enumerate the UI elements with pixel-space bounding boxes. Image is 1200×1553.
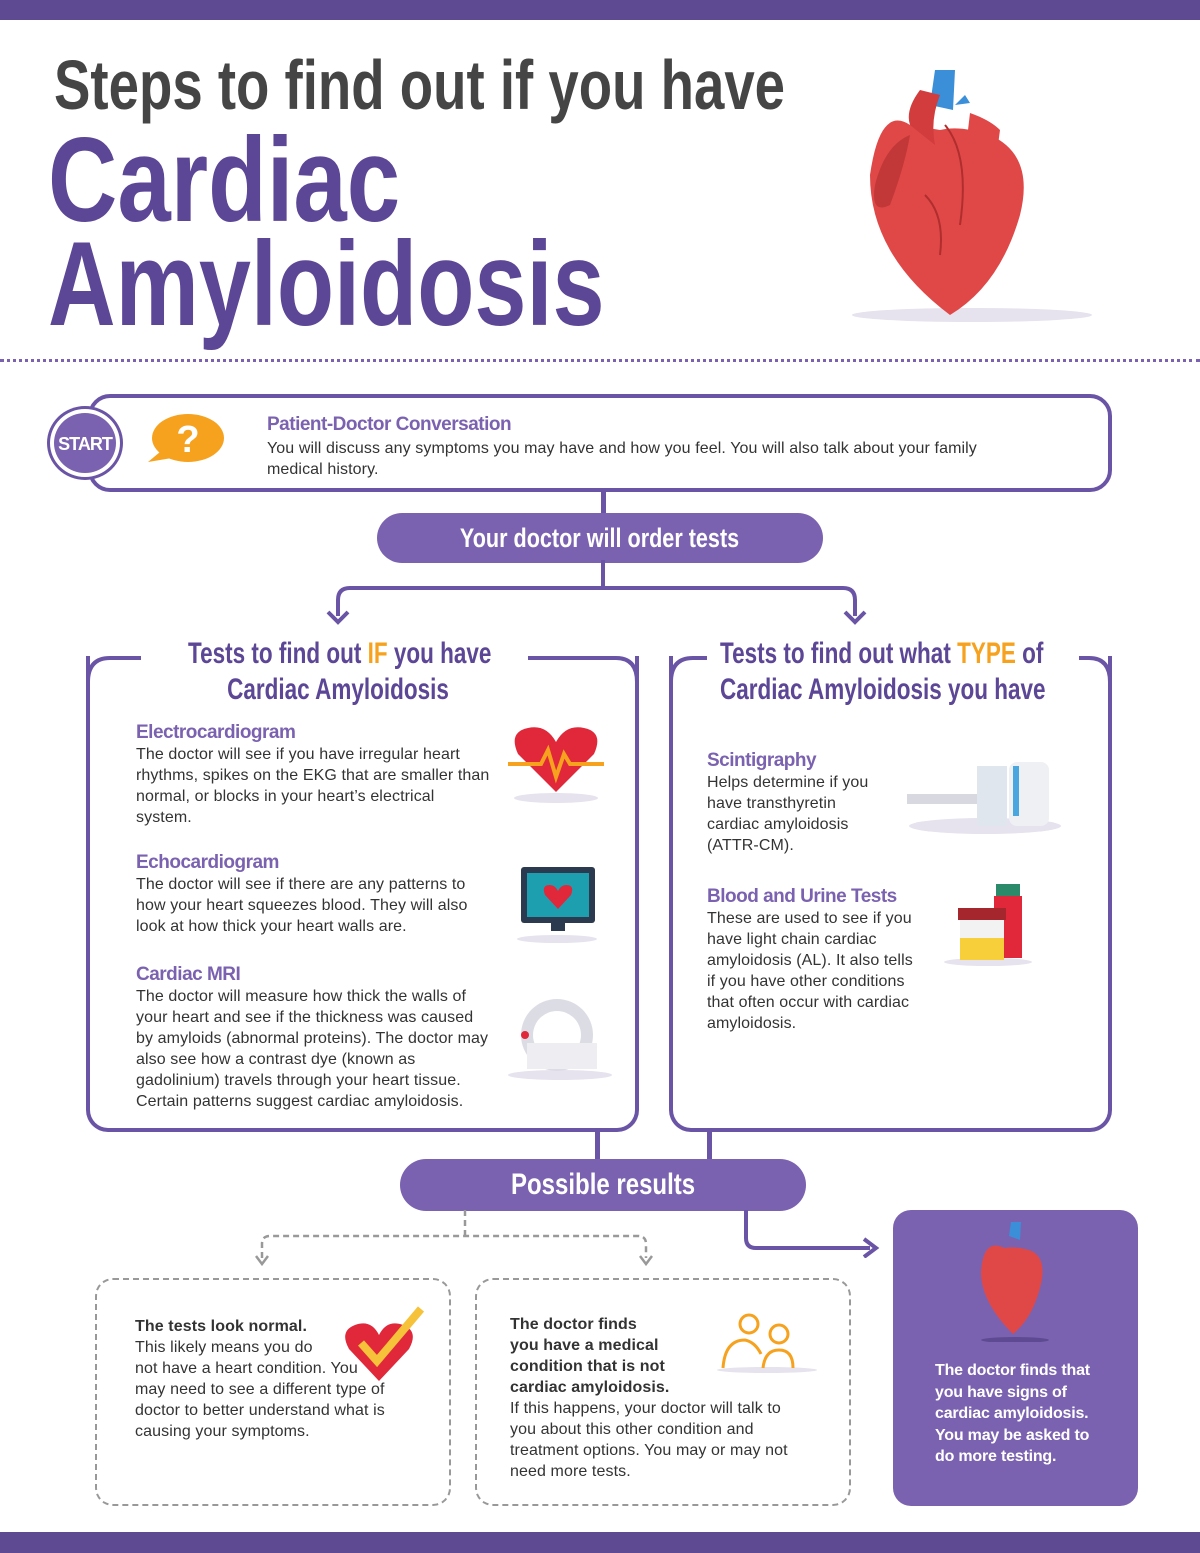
icon: heart EKG	[508, 727, 604, 803]
icon: heart	[852, 70, 1092, 322]
pill: order tests: Your doctor will order tests	[460, 523, 740, 553]
text: cardiac amyloidosis.	[510, 1379, 669, 1396]
text: The doctor finds	[510, 1316, 637, 1333]
heading: TYPE	[720, 637, 1046, 706]
block: MRI: The doctor will measure how thick the walls of your heart and see if the thickness was caused by amyloids (abnormal proteins). The doctor may also see how a contrast dye (known as gadolinium) travels through your heart tissue. Certain patterns suggest cardiac amyloidosis.	[136, 988, 488, 1110]
icon: question bubble	[148, 414, 224, 462]
icon: scanner	[907, 762, 1061, 834]
connector lines to results	[595, 1130, 600, 1162]
text: you have a medical	[510, 1337, 659, 1354]
heading: IF	[188, 637, 491, 706]
text: You will discuss any symptoms you may have and how you feel. You will also talk about your family medical history.	[267, 440, 977, 478]
block: blood urine: These are used to see if you have light chain cardiac amyloidosis (AL). It also tells if you have other conditions that often occur with cardiac amyloidosis.	[707, 910, 913, 1032]
pill: order tests	[377, 513, 823, 563]
text	[510, 1316, 788, 1480]
block: MRI: Cardiac MRI	[136, 964, 240, 985]
block: EKG: Electrocardiogram	[136, 722, 295, 743]
block: scintigraphy: Helps determine if you have transthyretin cardiac amyloidosis (ATTR-CM).	[707, 774, 868, 854]
block: blood urine: Blood and Urine Tests	[707, 886, 897, 907]
text: condition that is not	[510, 1358, 665, 1375]
text: If this happens, your doctor will talk to you about this other condition and treatment options. You may or may not need more tests.	[510, 1400, 788, 1480]
block: scintigraphy: Scintigraphy	[707, 750, 816, 771]
panel: amyloidosis found	[893, 1210, 1138, 1506]
divider dotted	[0, 359, 1200, 362]
title: Amyloidosis	[48, 217, 605, 351]
heading: Patient-Doctor Conversation	[267, 414, 511, 435]
title	[48, 46, 785, 351]
icon: monitor	[517, 867, 597, 943]
text	[135, 1318, 385, 1440]
arrow: dashed split	[255, 1210, 653, 1266]
connector lines	[601, 490, 606, 515]
icon: sample jars	[944, 884, 1032, 966]
pill: possible results	[400, 1159, 806, 1211]
text: The doctor finds that you have signs of cardiac amyloidosis. You may be asked to do more testing.	[935, 1362, 1090, 1465]
block: EKG: The doctor will see if you have irregular heart rhythms, spikes on the EKG that are smaller than normal, or blocks in your heart’s electrical system.	[136, 746, 489, 826]
text: not have a heart condition. You may need to see a different type of doctor to better understand what is causing your symptoms.	[135, 1360, 385, 1440]
arrow: to purple box	[744, 1210, 880, 1258]
block: Echo: Echocardiogram	[136, 852, 279, 873]
title: Cardiac	[48, 113, 400, 247]
panel: normal result	[95, 1278, 451, 1506]
text: This likely means you do	[135, 1339, 313, 1356]
title: Steps to find out if you have	[54, 46, 785, 124]
arrow: split	[326, 560, 866, 625]
panel: TYPE tests	[669, 656, 1112, 1132]
bottom bar	[0, 1532, 1200, 1553]
text: The tests look normal.	[135, 1318, 307, 1335]
icon: doctor patient	[717, 1314, 817, 1373]
heading: IF: Cardiac Amyloidosis	[227, 673, 449, 706]
icon: MRI machine	[508, 999, 612, 1080]
icon: start badge: START	[58, 434, 112, 454]
icon: question bubble: ?	[176, 419, 200, 461]
panel: patient-doctor conversation	[88, 394, 1112, 492]
heading: IF: Tests to find out IF you have	[188, 637, 491, 670]
panel: other condition	[475, 1278, 851, 1506]
icon: heart check	[345, 1306, 424, 1381]
icon: start badge	[50, 409, 120, 477]
icon: small heart	[981, 1222, 1049, 1342]
block: Echo: The doctor will see if there are any patterns to how your heart squeezes blood. They will also look at how thick your heart walls are.	[136, 876, 468, 935]
heading: TYPE: Cardiac Amyloidosis you have	[720, 673, 1046, 706]
heading: TYPE: Tests to find out what TYPE of	[720, 637, 1043, 670]
top bar	[0, 0, 1200, 20]
pill: possible results: Possible results	[511, 1168, 695, 1201]
panel: IF tests	[86, 656, 639, 1132]
